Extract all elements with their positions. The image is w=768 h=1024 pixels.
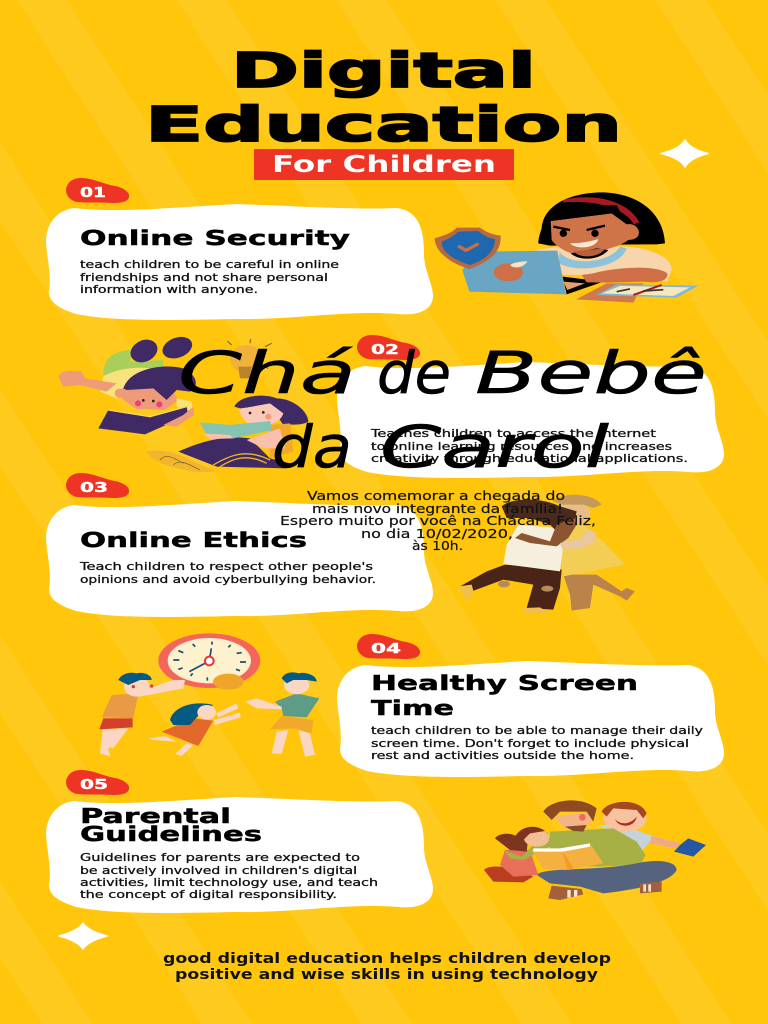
badge 05: 05	[80, 778, 108, 793]
illustration: children with clock	[99, 633, 319, 757]
panel: healthy screen time	[337, 634, 724, 777]
text: educational resources body: to online learning resources and increases	[371, 440, 672, 453]
boy behind	[597, 802, 706, 858]
overlay script heading	[178, 339, 707, 481]
overlay script heading: da	[272, 413, 352, 481]
badge 03: 03	[80, 481, 108, 496]
overlay script heading: Carol	[380, 413, 609, 481]
open book	[532, 843, 603, 870]
closing statement	[163, 951, 611, 983]
title: Digital	[231, 43, 536, 99]
girl	[484, 827, 553, 882]
overlay invitation text: no dia 10/02/2020,	[361, 527, 513, 541]
text: parental guidelines body: be actively involved in children's digital	[80, 864, 357, 877]
subtitle banner: For Children	[254, 149, 514, 180]
badge 01: 01	[80, 186, 106, 201]
clock	[158, 633, 260, 690]
heading: online ethics: Online Ethics	[80, 528, 307, 552]
overlay script heading: Chá	[178, 339, 356, 407]
illustration: girl with laptop and shield	[435, 192, 698, 303]
text: healthy screen time body	[371, 724, 704, 762]
subtitle banner: For Children: For Children	[272, 152, 496, 178]
heading: parental guidelines: Parental	[80, 804, 231, 828]
badge 01	[66, 178, 129, 203]
overlay invitation text: Espero muito por você na Chácara Feliz,	[280, 514, 596, 528]
closing statement: positive and wise skills in using technology	[175, 967, 598, 983]
illustration: two children hugging	[458, 495, 635, 613]
papers	[576, 283, 643, 303]
heading: parental guidelines	[80, 804, 262, 846]
icon: sparkle top right	[661, 140, 708, 167]
overlay script heading: Bebê	[475, 339, 707, 407]
panel: parental guidelines	[46, 770, 433, 913]
text: educational resources body	[370, 427, 688, 465]
text: educational resources body: creativity through educational applications.	[371, 452, 688, 465]
text: healthy screen time body: screen time. Don't forget to include physical	[371, 737, 689, 750]
text: online security body	[80, 258, 339, 296]
badge 03	[66, 473, 129, 498]
illustration: children reading books	[58, 333, 308, 472]
shield	[435, 228, 501, 269]
text: online security body: friendships and not share personal	[80, 271, 328, 284]
panel: online ethics	[46, 473, 433, 617]
text: parental guidelines body: activities, limit technology use, and teach	[80, 876, 378, 889]
badge 05	[66, 770, 129, 795]
illustration: father reading with children	[484, 800, 706, 900]
badge 02: 02	[371, 343, 399, 358]
lightbulb	[213, 339, 272, 378]
text: parental guidelines body	[80, 851, 378, 901]
heading: parental guidelines: Guidelines	[80, 822, 262, 846]
heading: healthy screen time: Time	[371, 696, 454, 720]
text: online ethics body: opinions and avoid cyberbullying behavior.	[80, 573, 376, 586]
text: healthy screen time body: rest and activities outside the home.	[371, 749, 634, 762]
heading: online security: Online Security	[80, 226, 350, 250]
girl middle	[148, 703, 241, 756]
father	[537, 800, 677, 900]
panel: online security	[46, 178, 433, 320]
text: online ethics body	[79, 560, 376, 586]
title	[145, 43, 622, 153]
title: Education	[145, 97, 622, 153]
text: parental guidelines body: Guidelines for parents are expected to	[80, 851, 360, 864]
text: online security body: information with anyone.	[80, 283, 258, 296]
laptop	[462, 251, 566, 294]
overlay invitation text: às 10h.	[412, 539, 463, 553]
closing statement: good digital education helps children develop	[163, 951, 611, 967]
keyboard	[563, 277, 603, 294]
text: parental guidelines body: the concept of digital responsibility.	[80, 888, 337, 901]
badge 04	[357, 634, 420, 659]
text: online security body: teach children to be careful in online	[80, 258, 339, 271]
text: online ethics body: Teach children to respect other people's	[79, 560, 373, 573]
heading: healthy screen time	[371, 671, 638, 720]
boy right	[245, 672, 319, 757]
second child	[234, 396, 308, 425]
heading: healthy screen time: Healthy Screen	[371, 671, 638, 695]
panel: educational resources	[337, 335, 724, 478]
boy left	[99, 673, 185, 757]
overlay invitation text: Vamos comemorar a chegada do	[307, 489, 565, 503]
overlay script heading: de	[377, 339, 451, 407]
badge 04: 04	[371, 642, 401, 657]
icon: sparkle bottom left	[59, 923, 107, 949]
text: healthy screen time body: teach children to be able to manage their daily	[371, 724, 704, 737]
overlay invitation text	[280, 489, 596, 553]
overlay invitation text: mais novo integrante da família!	[312, 502, 563, 516]
text: educational resources body: Teaches children to access the internet	[370, 427, 657, 440]
badge 02	[357, 335, 420, 360]
